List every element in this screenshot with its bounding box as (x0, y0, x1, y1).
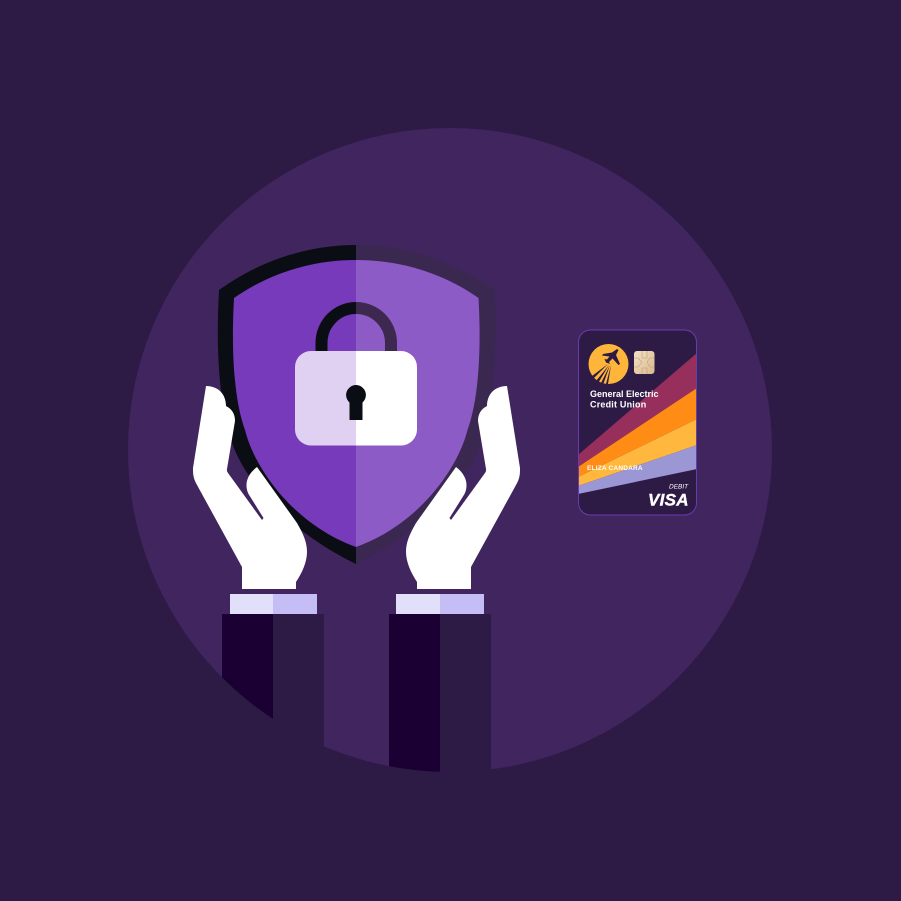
orange stripe (578, 388, 697, 477)
debit card (578, 330, 697, 515)
logo trails (592, 364, 611, 384)
card base (578, 330, 696, 515)
cuff light side (230, 594, 273, 614)
left hand (193, 386, 307, 589)
maroon stripe (578, 353, 697, 467)
cuff shaded side (440, 594, 484, 614)
sleeve light side (273, 614, 324, 746)
lock body left (295, 351, 356, 446)
right cuff (396, 594, 484, 614)
left sleeve (222, 614, 324, 746)
issuer name line 2: Credit Union (590, 400, 646, 410)
shackle left (322, 308, 356, 352)
lock body right (356, 351, 417, 446)
sleeve light side (440, 614, 491, 774)
chip body (634, 351, 654, 374)
right sleeve (389, 614, 491, 774)
card stripes (578, 353, 697, 494)
background circle (128, 128, 772, 772)
padlock (295, 308, 417, 446)
right hand (406, 386, 520, 589)
cuff shaded side (273, 594, 317, 614)
sleeve dark side (389, 614, 440, 774)
chip lines (634, 351, 654, 374)
lavender stripe (578, 445, 697, 494)
shield face left (233, 260, 356, 547)
logo plane (602, 349, 620, 365)
keyhole (346, 385, 366, 420)
shield outer border left (218, 245, 356, 564)
shield (218, 245, 495, 564)
left cuff (230, 594, 317, 614)
yellow stripe (578, 419, 697, 486)
issuer name: General Electric (590, 389, 659, 399)
shackle right (356, 308, 391, 352)
cardholder name: ELIZA CANDARA (587, 465, 643, 472)
cuff light side (396, 594, 440, 614)
shield outer border right (356, 245, 495, 564)
debit label: DEBIT (669, 484, 689, 490)
shield face right (356, 260, 480, 547)
logo circle (588, 344, 628, 384)
sleeve dark side (222, 614, 273, 719)
chip (634, 351, 654, 374)
card border (578, 330, 696, 515)
visa logo: VISA (648, 490, 689, 510)
